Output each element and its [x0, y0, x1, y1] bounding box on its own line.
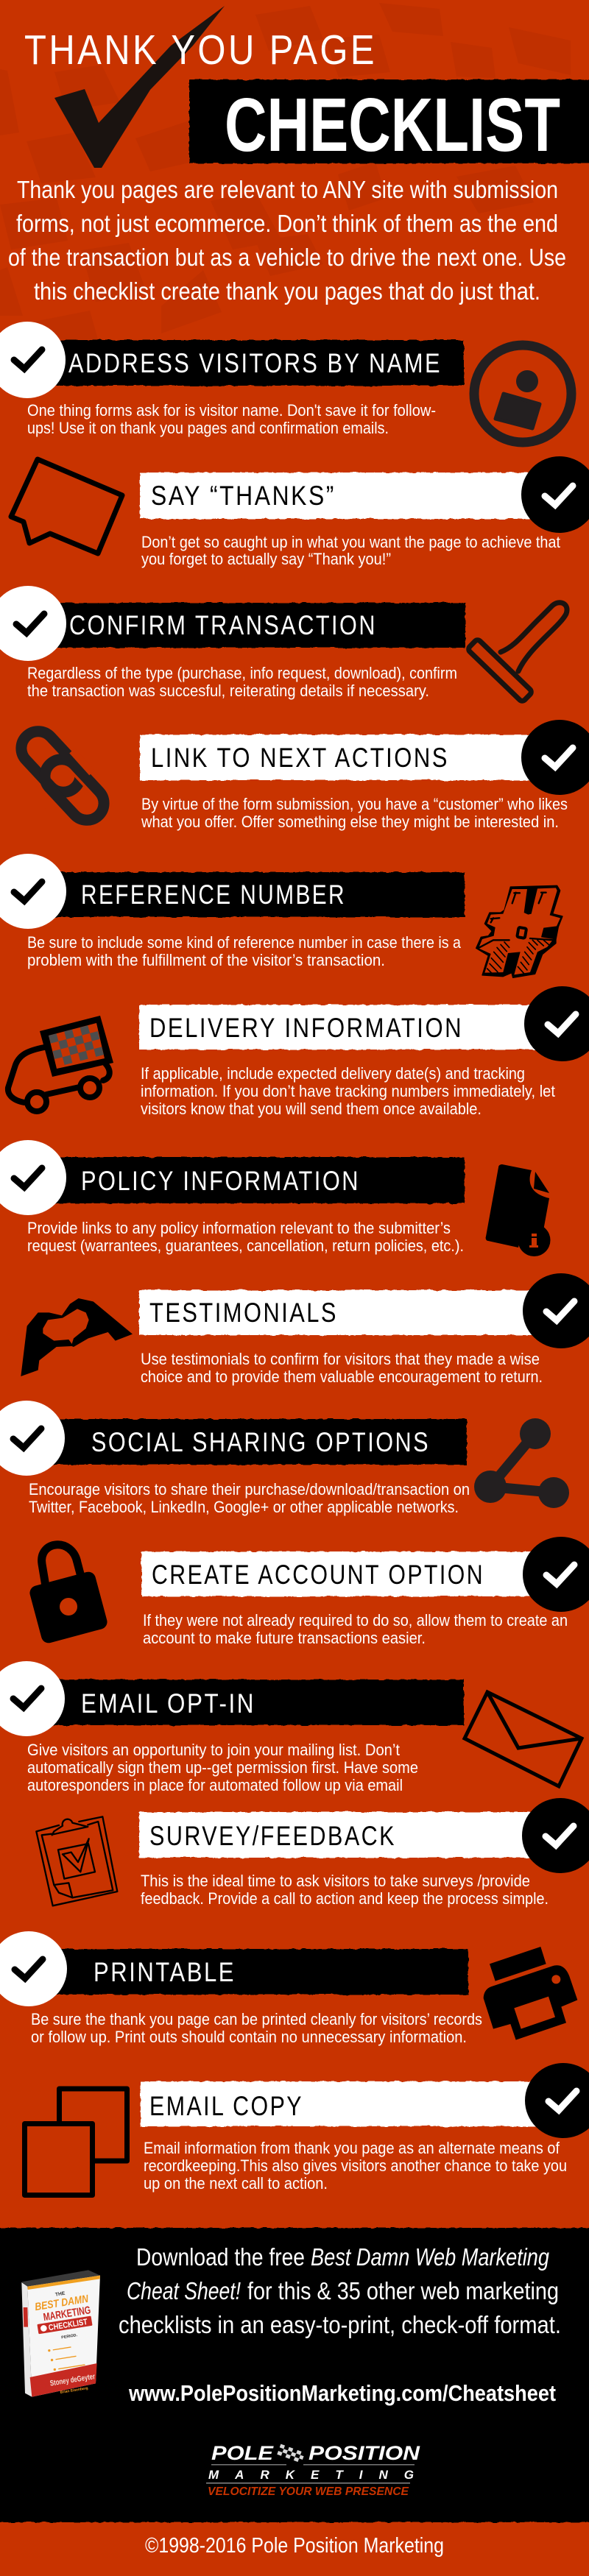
- icon: person in ring: [474, 345, 571, 442]
- description: request (warrantees, guarantees, cancellation, return policies, etc.).: [27, 1236, 464, 1255]
- heading: SOCIAL SHARING OPTIONS: [91, 1427, 430, 1457]
- logo: pole position marketing: [206, 2442, 420, 2498]
- panel: email opt-in: [0, 1661, 582, 1794]
- footer background: [0, 2228, 589, 2522]
- icon: clipboard with check: [36, 1816, 117, 1906]
- panel: footer call to action: [0, 2228, 589, 2522]
- book image: THE: [55, 2291, 66, 2298]
- description: [143, 1611, 568, 1647]
- check badge: [521, 456, 589, 533]
- book image: PERIOD.: [61, 2333, 78, 2340]
- icon: share nodes: [474, 1418, 569, 1508]
- heading bar: [140, 473, 545, 519]
- logo: pole position marketing: POLE: [211, 2442, 274, 2464]
- check badge: [525, 2063, 589, 2138]
- copyright: ©1998-2016 Pole Position Marketing: [145, 2534, 444, 2558]
- description: If applicable, include expected delivery date(s) and tracking: [141, 1064, 525, 1083]
- icon: large check mark: [54, 6, 225, 168]
- heading: SAY “THANKS”: [151, 481, 336, 511]
- title: thank you page: THANK YOU PAGE: [24, 26, 377, 74]
- panel: link to next actions: [14, 720, 589, 831]
- heading: EMAIL OPT-IN: [81, 1688, 255, 1719]
- description: [29, 1480, 470, 1516]
- heading: CONFIRM TRANSACTION: [69, 610, 377, 640]
- panel: printable: [0, 1931, 577, 2046]
- panel: email copy: [25, 2063, 589, 2195]
- description: Encourage visitors to share their purchase/download/transaction on: [29, 1480, 470, 1498]
- heading bar: [37, 603, 465, 648]
- icon: printer: [484, 1947, 577, 2040]
- description: autoresponders in place for automated follow up via email: [27, 1776, 403, 1794]
- check badge: [0, 854, 66, 929]
- description: One thing forms ask for is visitor name. Don't save it for follow-: [27, 401, 436, 420]
- heading bar: [37, 340, 464, 386]
- icon: envelope: [465, 1692, 582, 1786]
- icon: delivery truck: [8, 1016, 113, 1111]
- panel: say thanks: [11, 456, 589, 568]
- panel: create account option: [28, 1537, 589, 1647]
- heading: TESTIMONIALS: [149, 1298, 338, 1328]
- description: [27, 401, 436, 437]
- icon: chain links: [14, 724, 111, 827]
- check badge: [523, 1273, 589, 1348]
- description: [141, 533, 560, 568]
- logo: pole position marketing: VELOCITIZE YOUR WEB PRESENCE: [208, 2485, 409, 2498]
- description: [27, 933, 462, 969]
- heading bar: [140, 735, 545, 780]
- description: [141, 1872, 549, 1908]
- description: This is the ideal time to ask visitors to take surveys /provide: [141, 1872, 530, 1890]
- description: [27, 664, 457, 700]
- heading bar: [141, 1551, 546, 1596]
- heading: REFERENCE NUMBER: [81, 880, 346, 910]
- download text: Cheat Sheet!: [127, 2277, 241, 2304]
- description: Use testimonials to confirm for visitors that they made a wise: [141, 1350, 540, 1368]
- heading: CREATE ACCOUNT OPTION: [152, 1560, 484, 1590]
- description: up on the next call to action.: [144, 2174, 328, 2193]
- description: the transaction was succesful, reiterating details if necessary.: [27, 682, 429, 700]
- heading bar: [37, 1157, 465, 1203]
- check badge: [0, 586, 66, 661]
- logo: checkered flag: [277, 2444, 305, 2463]
- description: Be sure to include some kind of reference number in case there is a: [27, 933, 462, 952]
- heading bar: [37, 872, 465, 917]
- check badge: [0, 1931, 67, 2006]
- check badge: [523, 1537, 589, 1612]
- book image: Brian Eisenberg: [60, 2386, 88, 2395]
- description: [27, 1219, 464, 1255]
- book image: MARKETING: [43, 2304, 91, 2324]
- description: [141, 1350, 543, 1386]
- description: [27, 1741, 418, 1794]
- book image: CHECKLIST: [48, 2318, 88, 2332]
- description: automatically sign them up--get permission first. Have some: [27, 1758, 418, 1777]
- description: [31, 2010, 482, 2046]
- check badge: [0, 1401, 65, 1476]
- panel: testimonials: [21, 1273, 589, 1386]
- description: [144, 2139, 567, 2193]
- logo: pole position marketing: POSITION: [308, 2442, 420, 2464]
- description: what you offer. Offer something else they might be interested in.: [141, 813, 559, 831]
- check badge: [0, 1661, 65, 1736]
- heading: EMAIL COPY: [149, 2091, 303, 2121]
- heading: SURVEY/FEEDBACK: [149, 1821, 396, 1851]
- heading: ADDRESS VISITORS BY NAME: [68, 348, 442, 378]
- description: Be sure the thank you page can be printed cleanly for visitors’ records: [31, 2010, 482, 2028]
- check badge: [522, 1798, 589, 1873]
- heading: PRINTABLE: [94, 1957, 236, 1987]
- heading: LINK TO NEXT ACTIONS: [151, 743, 449, 773]
- description: or follow up. Print outs should contain no unnecessary information.: [31, 2028, 467, 2046]
- logo: pole position marketing: MARKETING: [208, 2468, 414, 2482]
- check badge: [521, 720, 589, 795]
- check badge: [0, 322, 66, 398]
- icon: hash sign: [476, 885, 562, 977]
- panel: address visitors by name: [0, 322, 571, 442]
- download text: [119, 2243, 561, 2338]
- heading bar: [139, 1290, 544, 1335]
- description: Regardless of the type (purchase, info request, download), confirm: [27, 664, 457, 682]
- description: problem with the fulfillment of the visitor’s transaction.: [27, 951, 385, 969]
- description: you forget to actually say “Thank you!”: [141, 550, 391, 568]
- icon: document with info badge: [486, 1164, 551, 1256]
- heading: DELIVERY INFORMATION: [149, 1013, 463, 1043]
- check badge: [0, 1140, 66, 1215]
- book image: [21, 2270, 103, 2397]
- description: visitors know that you will send them once available.: [141, 1100, 482, 1118]
- panel: reference number: [0, 854, 562, 977]
- description: information. If you don’t have tracking numbers immediately, let: [141, 1082, 555, 1100]
- icon: speech bubble: [11, 459, 122, 553]
- heading bar: [37, 1949, 468, 1995]
- heading: POLICY INFORMATION: [81, 1166, 360, 1196]
- heading bar: [141, 2081, 546, 2126]
- description: Provide links to any policy information relevant to the submitter’s: [27, 1219, 451, 1237]
- icon: stamp: [468, 603, 567, 702]
- download text: Download the free: [136, 2243, 305, 2271]
- heading bar: [37, 1419, 467, 1465]
- heading bar: [37, 1680, 464, 1725]
- icon: padlock: [28, 1545, 109, 1645]
- panel: policy information: [0, 1140, 551, 1256]
- panel: confirm transaction: [0, 586, 567, 702]
- panel: survey feedback: [36, 1798, 589, 1908]
- description: account to make future transactions easier.: [143, 1629, 426, 1647]
- description: Give visitors an opportunity to join your mailing list. Don’t: [27, 1741, 400, 1759]
- check badge: [524, 986, 589, 1061]
- description: choice and to provide them valuable encouragement to return.: [141, 1367, 543, 1386]
- intro text: [8, 176, 566, 305]
- description: [141, 795, 568, 831]
- background: checker pattern: [0, 3, 571, 339]
- book image: Stoney deGeyter: [49, 2372, 96, 2388]
- icon: heart hands: [21, 1298, 133, 1376]
- heading bar: [139, 1812, 544, 1858]
- description: [141, 1064, 555, 1118]
- heading bar: [139, 1005, 544, 1050]
- description: Twitter, Facebook, LinkedIn, Google+ or other applicable networks.: [29, 1498, 459, 1516]
- book image: BEST DAMN: [34, 2293, 89, 2313]
- panel: social sharing options: [0, 1401, 569, 1516]
- description: ups! Use it on thank you pages and confirmation emails.: [27, 419, 389, 437]
- icon: overlapping squares: [25, 2089, 127, 2195]
- panel: delivery information: [8, 986, 589, 1118]
- description: feedback. Provide a call to action and keep the process simple.: [141, 1889, 549, 1908]
